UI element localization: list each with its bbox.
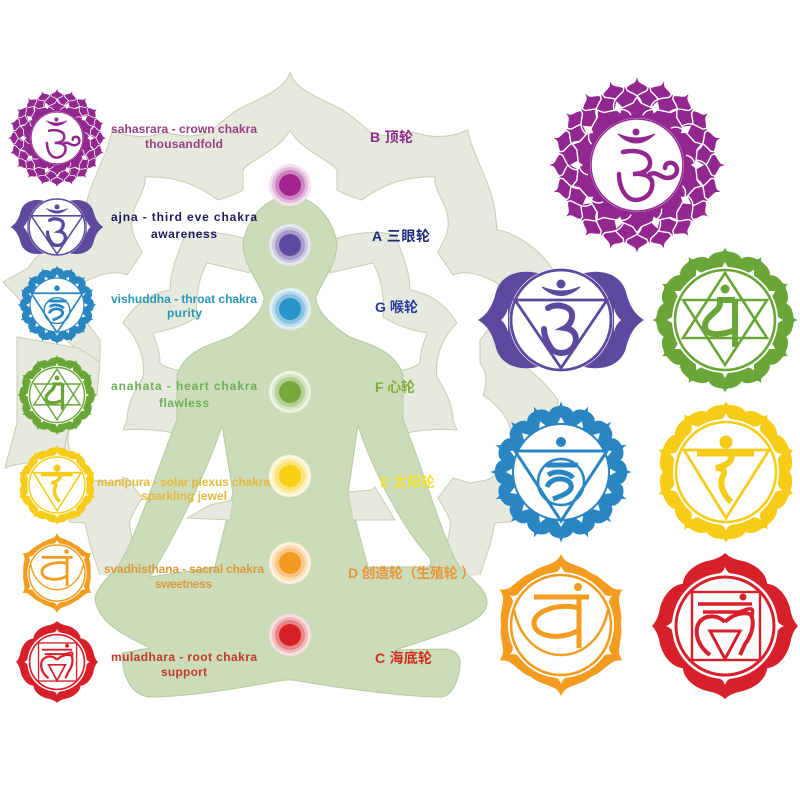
large icon: anahata [652, 247, 798, 393]
chakra point: heart [269, 371, 311, 413]
label: sahasrara [111, 122, 257, 151]
small icon: ajna [11, 198, 103, 256]
chinese label: C: C 海底轮 [375, 650, 432, 666]
label: sahasrara: thousandfold [145, 137, 223, 151]
large icon: vishuddha [490, 401, 632, 543]
meditating body silhouette [95, 196, 487, 697]
label: vishuddha: purity [167, 306, 202, 320]
large icon: svadhisthana [483, 554, 639, 696]
label: anahata: flawless [159, 396, 209, 410]
label: ajna: ajna - third eve chakra [111, 210, 257, 224]
label: ajna: awareness [151, 227, 217, 241]
large icon: sahasrara [510, 34, 768, 292]
label: muladhara [111, 650, 257, 679]
chakra point: crown [269, 164, 311, 206]
chakra point: root [269, 614, 311, 656]
label: vishuddha: vishuddha - throat chakra [111, 292, 257, 306]
label: manipura: manipura - solar plexus chakra [97, 475, 270, 489]
label: manipura [97, 475, 270, 503]
chinese label: D: D 创造轮（生殖轮 ） [348, 565, 475, 581]
chinese label: F: F 心轮 [375, 379, 415, 395]
large icon: muladhara [652, 553, 798, 699]
label: svadhisthana: sweetness [155, 577, 212, 591]
label: muladhara: muladhara - root chakra [111, 650, 257, 664]
lotus background [3, 72, 577, 600]
label: ajna [111, 210, 257, 241]
label: muladhara: support [161, 665, 207, 679]
chakra point: third eye [269, 224, 311, 266]
label: anahata [111, 379, 257, 410]
chakra point: solar plexus [269, 455, 311, 497]
label: sahasrara: sahasrara - crown chakra [111, 122, 257, 136]
chinese label: E: E 太阳轮 [380, 474, 435, 490]
large icon: ajna [478, 268, 644, 372]
left arm gap [150, 425, 233, 577]
chinese label: A: A 三眼轮 [372, 228, 430, 244]
label: anahata: anahata - heart chakra [111, 379, 257, 393]
chakra point: sacral [269, 542, 311, 584]
label: svadhisthana [104, 562, 264, 591]
chinese label: G: G 喉轮 [375, 299, 418, 315]
small icon: svadhisthana [13, 533, 101, 613]
small icon: sahasrara [0, 65, 131, 209]
small icon: manipura [16, 445, 98, 525]
right arm gap [348, 425, 431, 567]
label: vishuddha [111, 292, 257, 320]
small icon: vishuddha [17, 265, 97, 345]
label: manipura: sparkling jewel [141, 489, 227, 503]
label: svadhisthana: svadhisthana - sacral chakra [104, 562, 264, 576]
large icon: manipura [652, 401, 800, 543]
small icon: muladhara [16, 621, 98, 703]
chakra point: throat [269, 288, 311, 330]
small icon: anahata [17, 355, 97, 435]
chinese label: B: B 顶轮 [370, 129, 413, 145]
